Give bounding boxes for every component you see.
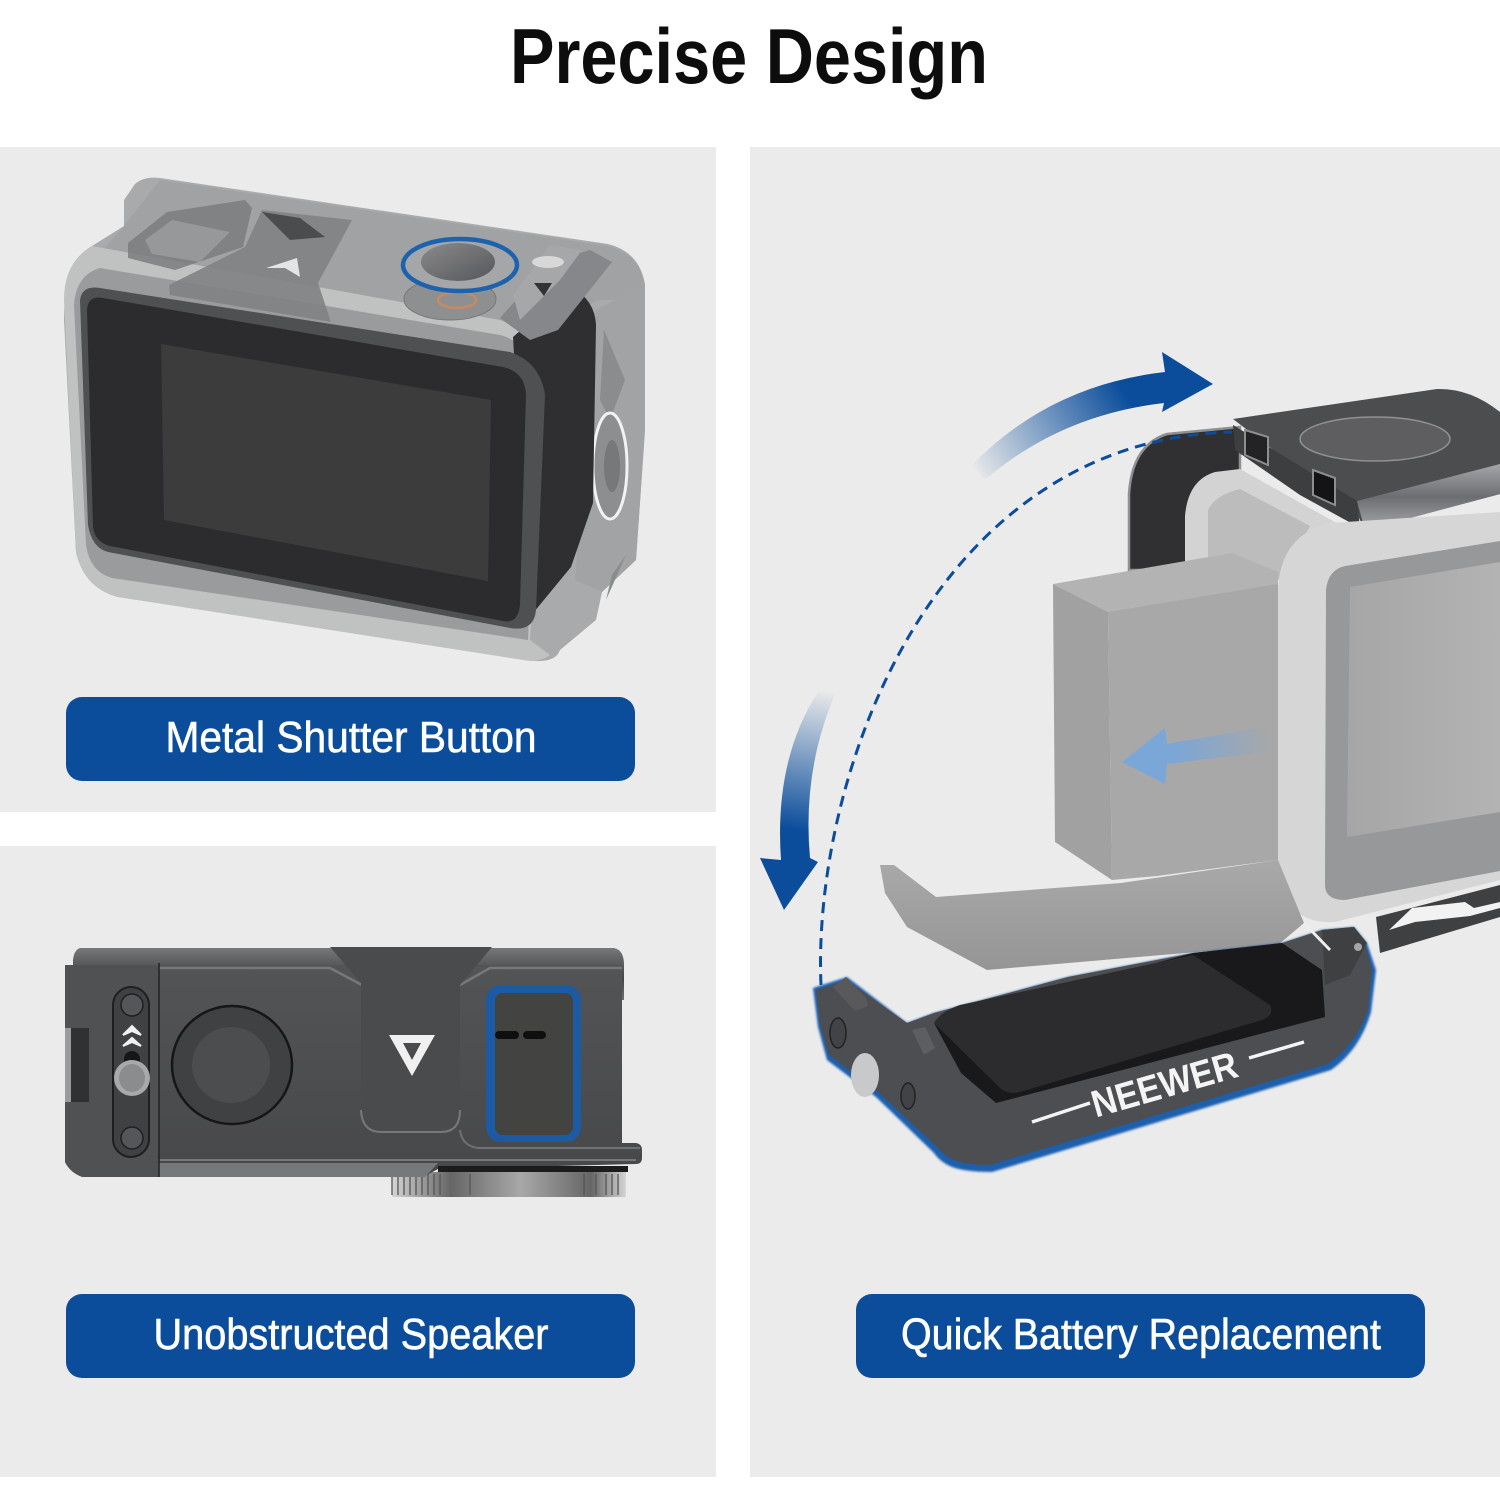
body top rim: [73, 948, 624, 1000]
top bracket: [1233, 389, 1500, 530]
speaker highlight: [486, 985, 581, 1142]
label: quick battery replacement: Quick Battery Replacement: [901, 1310, 1381, 1359]
front frame: [1278, 512, 1500, 922]
center tab: [330, 947, 492, 1132]
lens ring: [392, 1172, 626, 1197]
rear light frame: [1185, 469, 1340, 580]
label: quick battery replacement: [856, 1294, 1425, 1378]
label: metal shutter button: Metal Shutter Button: [166, 713, 536, 762]
side cover: [65, 965, 159, 1177]
label: unobstructed speaker: Unobstructed Speaker: [154, 1310, 548, 1359]
brand: NEEWER: [1087, 1045, 1243, 1126]
shutter knob: [172, 1006, 292, 1124]
battery door flap: [880, 860, 1304, 970]
battery pad: [934, 955, 1271, 1093]
camera with battery illustration: [760, 352, 1500, 1172]
slider pill: [113, 987, 150, 1157]
arrow: battery insertion: [1122, 726, 1273, 784]
label: metal shutter button: [66, 697, 635, 781]
arrow: upward rotation: [972, 352, 1213, 480]
dark body side: [513, 287, 596, 618]
screen outer: [1325, 541, 1500, 900]
battery: [1053, 553, 1278, 880]
camera case illustration: [64, 178, 645, 661]
body plate: [65, 965, 642, 1176]
panel: metal shutter button: [0, 147, 716, 812]
logo triangle: [389, 1035, 435, 1076]
title: Precise Design: [510, 12, 988, 100]
top bracket pieces: [128, 200, 252, 270]
thumb knob: [851, 1053, 879, 1097]
camera top view illustration: [65, 947, 642, 1197]
cavity: [934, 943, 1325, 1103]
side wall and dial: [575, 285, 645, 592]
screws: [830, 1018, 846, 1048]
screen face: [87, 298, 526, 621]
arrow: downward rotation: [760, 692, 836, 910]
dashed arc: [821, 432, 1232, 985]
hinge: [1322, 927, 1367, 985]
screen: [161, 344, 491, 581]
shutter button highlight: [403, 239, 517, 320]
side bracket: [1376, 885, 1500, 953]
panel: unobstructed speaker: [0, 846, 716, 1477]
label: unobstructed speaker: [66, 1294, 635, 1378]
panel: quick battery replacement: [750, 147, 1500, 1477]
screen inner: [1347, 562, 1500, 837]
rear dark frame: [1129, 427, 1240, 570]
latch post: [833, 977, 868, 1011]
screen bezel: [80, 288, 545, 629]
open door: [813, 923, 1376, 1172]
